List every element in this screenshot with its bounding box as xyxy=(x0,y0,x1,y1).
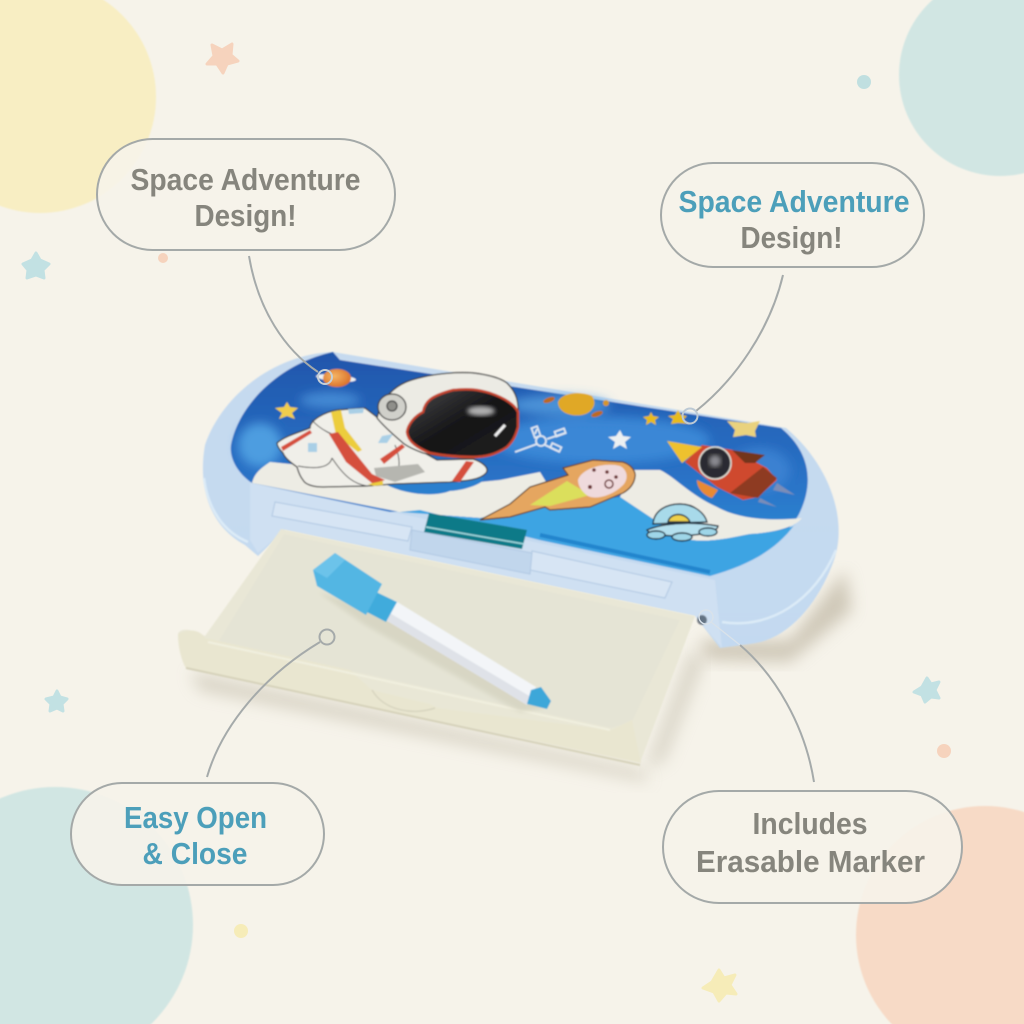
illustration: ufo xyxy=(647,504,718,541)
callout: includes erasable marker xyxy=(663,791,962,903)
callout: includes erasable marker: Erasable Marker xyxy=(696,844,925,879)
white cloud right xyxy=(620,470,802,541)
ear piece xyxy=(378,394,406,420)
white cloud left xyxy=(252,462,560,518)
icon: planet xyxy=(316,369,356,387)
visor xyxy=(407,389,518,457)
marker tip xyxy=(527,687,551,709)
leader: marker xyxy=(699,610,814,782)
decorative circle: peach bottom right xyxy=(856,806,1024,1024)
product: tray xyxy=(178,529,695,765)
tray thumb notch xyxy=(372,690,435,711)
side screw xyxy=(697,615,707,625)
callout leader lines xyxy=(207,256,814,782)
illustration: rocket xyxy=(667,441,795,507)
teal clasp xyxy=(424,513,527,549)
icon: stars xyxy=(275,402,760,449)
helmet xyxy=(377,373,519,458)
callout: space adventure design left: Design! xyxy=(194,198,296,233)
blue swoosh under astronaut xyxy=(385,477,484,494)
callout: easy open and close: Easy Open xyxy=(124,800,267,835)
callout: space adventure design left: Space Adventure xyxy=(130,162,360,197)
product: pencil case xyxy=(203,352,839,648)
decorative circle: teal bottom left xyxy=(0,787,193,1024)
illustration: comet girl xyxy=(480,460,635,520)
leader: space design left xyxy=(249,256,332,384)
marker grip xyxy=(363,590,397,622)
decorative circle: yellow top left xyxy=(0,0,156,213)
suit creases xyxy=(298,420,399,486)
panel blue background xyxy=(231,352,808,576)
tray floor xyxy=(218,534,680,728)
suit patches xyxy=(348,408,364,414)
astronaut body xyxy=(277,408,487,487)
callout: easy open and close: & Close xyxy=(142,836,248,871)
front latch strip xyxy=(250,482,722,648)
product shadow xyxy=(190,570,852,782)
callout: space adventure design right: Space Adventure xyxy=(678,184,910,219)
visor highlights xyxy=(467,406,495,416)
icon: asteroid xyxy=(543,393,609,418)
case lower lip highlight xyxy=(204,478,836,623)
illustration: astronaut xyxy=(277,373,519,487)
leader: space design right xyxy=(682,275,783,424)
callout: easy open and close xyxy=(71,783,324,885)
suit stripes xyxy=(331,410,362,452)
marker shadow xyxy=(318,592,545,712)
decorative dots xyxy=(158,75,951,938)
decorative circle: teal top right xyxy=(899,0,1024,176)
callout: space adventure design left xyxy=(97,139,395,250)
latch clips xyxy=(272,502,672,598)
leader: easy open xyxy=(207,630,334,777)
illustrated panel xyxy=(231,352,808,576)
callout: space adventure design right xyxy=(661,163,924,267)
tray front lip xyxy=(178,631,641,763)
case body xyxy=(203,352,839,648)
blue sky glow xyxy=(238,392,790,492)
marker pen xyxy=(313,553,551,712)
grey chest plate xyxy=(374,464,425,482)
icon: satellite xyxy=(515,426,566,452)
marker cap xyxy=(313,553,382,615)
callout: space adventure design right: Design! xyxy=(740,220,842,255)
lower blue lake xyxy=(400,497,795,576)
marker body xyxy=(384,600,536,705)
callout: includes erasable marker: Includes xyxy=(752,806,868,841)
tray body xyxy=(178,529,695,763)
